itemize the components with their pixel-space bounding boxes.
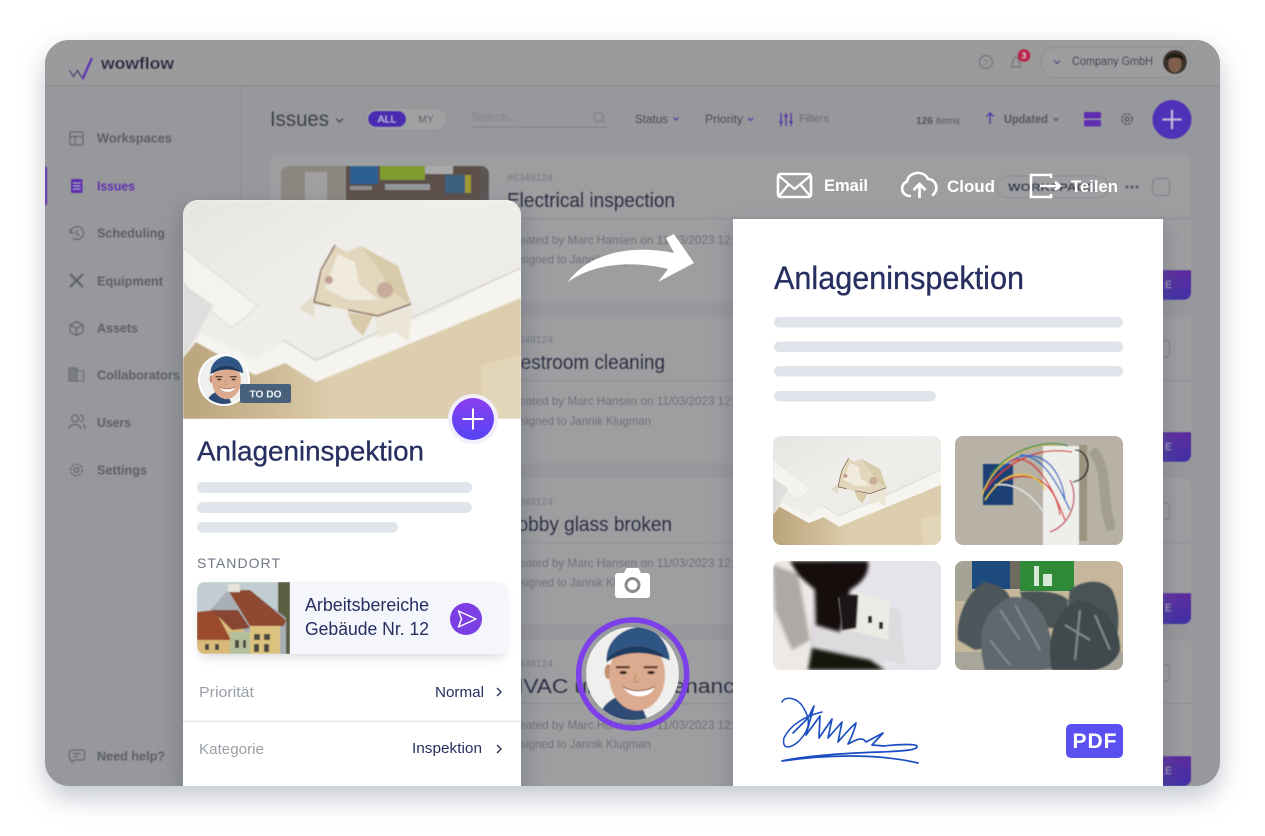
row action button (1000, 756, 1191, 786)
row text: Lobby glass broken (507, 514, 672, 536)
priority filter: Priority (705, 114, 743, 126)
nav: equipment: Equipment (97, 274, 164, 288)
nav: issues (71, 178, 135, 194)
mobile issue card (183, 200, 521, 786)
company selector (1040, 47, 1190, 78)
row text (521, 336, 733, 428)
all/my toggle (366, 110, 446, 128)
generated PDF report (733, 219, 1163, 786)
row action button (1163, 432, 1192, 462)
navigate button (450, 603, 482, 635)
row text: Created by Marc Hansen on 11/03/2023 12:30 (507, 556, 747, 570)
share option: cloud (902, 173, 995, 198)
logo (70, 54, 175, 78)
category row: Inspektion (412, 740, 482, 757)
row text: Assigned to Jannik Klugman (507, 576, 651, 590)
filters (779, 113, 829, 126)
location name: Arbeitsbereiche (305, 595, 429, 615)
row text: Created by Marc Hansen on 11/03/2023 12:30 (507, 718, 747, 732)
row text: HVAC unit maintenance (507, 676, 747, 698)
search (471, 110, 608, 128)
help icon: ? (983, 58, 989, 68)
search: Search... (471, 110, 517, 124)
location label: STANDORT (197, 555, 280, 571)
add button (448, 394, 498, 444)
assignee avatar (198, 354, 250, 406)
nav: issues: Issues (97, 178, 135, 194)
issue row 2 (521, 336, 1192, 462)
row text: #6348124 (507, 659, 553, 670)
share option: teilen (1031, 175, 1118, 197)
row action button: E (1165, 603, 1172, 614)
help icon (980, 56, 992, 68)
page heading (271, 111, 344, 126)
nav: scheduling: Scheduling (97, 226, 165, 240)
row text (507, 497, 747, 590)
location name (305, 595, 429, 639)
all/my toggle: ALL (378, 114, 396, 126)
share option: email (778, 174, 868, 197)
location photo: houses (197, 582, 290, 654)
technician portrait (579, 620, 687, 728)
logo: wowflow (100, 54, 175, 73)
row action button: E (1165, 766, 1172, 777)
photo: garbage bags (955, 561, 1123, 670)
workspace tag: WORKSPACE (1008, 182, 1095, 194)
top bar (45, 40, 1220, 86)
row text: Created by Marc Hansen on 11/03/2023 12:30 (507, 394, 747, 408)
row text: #6348124 (507, 497, 553, 508)
card title: Anlageninspektion (197, 436, 424, 466)
card photo: damaged ceiling (183, 200, 521, 419)
share option: teilen: Teilen (1071, 177, 1118, 196)
description placeholder lines (197, 482, 472, 532)
company selector: Company GmbH (1072, 56, 1153, 68)
priority row: Priorität (199, 684, 255, 701)
sort updated: Updated (1004, 114, 1048, 126)
status badge: TO DO (250, 388, 282, 400)
nav: workspaces: Workspaces (97, 130, 172, 146)
sort updated (986, 113, 1058, 126)
notification bell (1011, 49, 1030, 67)
row text (507, 173, 747, 266)
row action button (1000, 593, 1191, 624)
issue row 4 (270, 640, 1191, 786)
signature (782, 698, 918, 763)
status filter: Status (635, 114, 668, 126)
checkbox (1152, 178, 1170, 196)
pdf badge (1066, 724, 1123, 758)
row action button: E (1165, 280, 1172, 291)
photo: ceiling damage (773, 436, 941, 545)
photo: burnt socket (773, 561, 941, 670)
nav: help: Need help? (97, 748, 165, 764)
more dots (1126, 186, 1138, 188)
gear (1122, 114, 1132, 124)
row text: Created by Marc Hansen on 11/03/2023 12:30 (507, 233, 747, 247)
row text: Assigned to Jannik Klugman (507, 414, 651, 428)
pdf badge: PDF (1072, 730, 1117, 753)
row action button: E (1165, 442, 1172, 453)
nav: assets (70, 320, 138, 336)
nav: users (69, 415, 131, 430)
filters: Filters (799, 113, 829, 125)
checkbox (1152, 664, 1170, 682)
row action button (1163, 270, 1192, 300)
nav: assets: Assets (97, 320, 138, 336)
row text: #6348124 (507, 335, 553, 346)
row image: electrical panel (280, 166, 490, 200)
share option: email: Email (824, 176, 868, 195)
row text: Assigned to Jannik Klugman (507, 252, 651, 266)
workspace tag (997, 176, 1108, 198)
camera icon (615, 568, 650, 598)
page heading: Issues (270, 108, 329, 131)
priority row: Normal (435, 684, 484, 701)
item count: 126 items (916, 116, 960, 127)
nav: settings: Settings (97, 462, 147, 478)
photo: wiring on breadboard (955, 436, 1123, 546)
toolbar (270, 100, 1192, 139)
issue row 1 (270, 155, 1191, 301)
row text: Electrical inspection (507, 190, 675, 212)
nav: users: Users (97, 415, 131, 430)
status badge (240, 384, 291, 403)
row text (507, 659, 747, 751)
nav: help (70, 748, 165, 764)
sidebar (45, 86, 241, 786)
document shadow (727, 224, 1169, 814)
issue row 3 (270, 478, 1191, 624)
add button (1152, 100, 1192, 139)
all/my toggle: MY (418, 114, 434, 126)
category row (199, 740, 501, 758)
text placeholder lines (774, 317, 1123, 402)
status filter (635, 114, 680, 124)
location name: Gebäude Nr. 12 (305, 619, 429, 639)
arrow: card to report (568, 234, 694, 282)
view toggle (1084, 112, 1101, 126)
row text: #6348124 (507, 173, 553, 184)
nav: settings (71, 462, 147, 478)
location card (197, 582, 507, 658)
checkbox (1163, 340, 1170, 358)
checkbox (1152, 502, 1170, 520)
report title: Anlageninspektion (774, 260, 1024, 296)
notification bell: 3 (1022, 52, 1027, 60)
priority row (199, 684, 501, 701)
row text: Assigned to Jannik Klugman (507, 737, 651, 751)
nav: collaborators: Collaborators (97, 368, 180, 382)
category row: Kategorie (199, 741, 264, 758)
share option: cloud: Cloud (947, 177, 995, 196)
row text: Restroom cleaning (507, 352, 665, 374)
card shadow (177, 205, 527, 805)
